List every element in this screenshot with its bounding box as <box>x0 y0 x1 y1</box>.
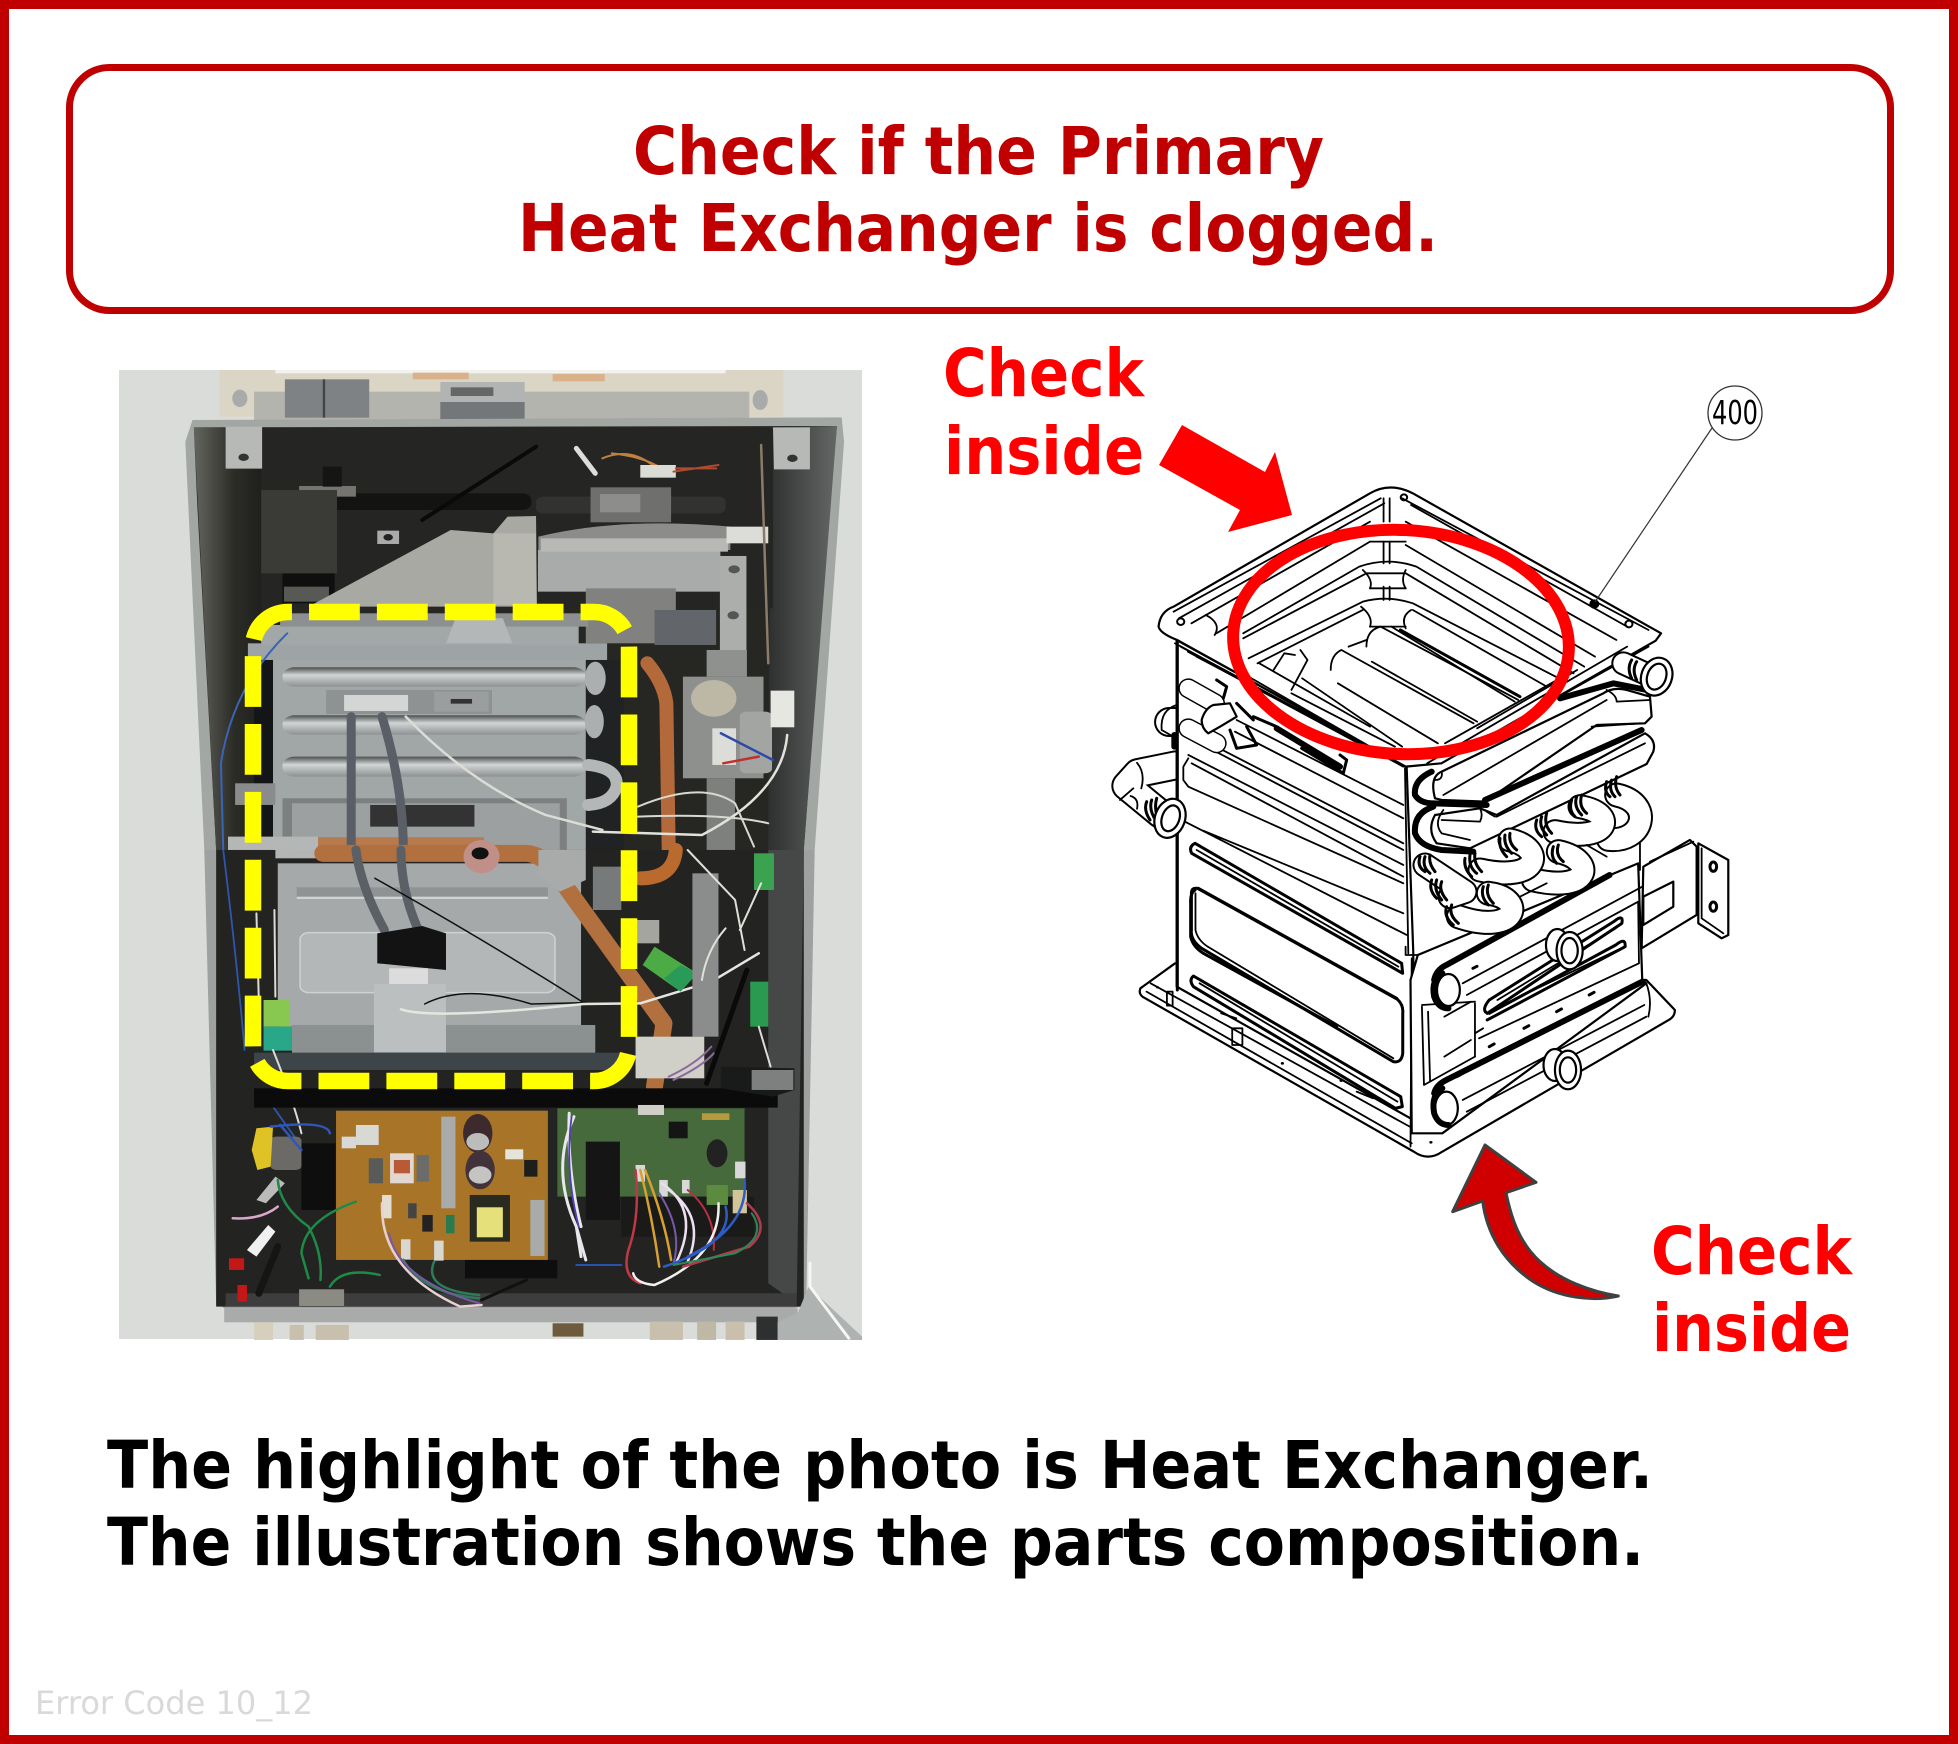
header callout box <box>70 68 1890 310</box>
yellow dashed highlight <box>253 612 629 1081</box>
mounting bracket <box>1642 840 1728 948</box>
check inside label: lower: Check <box>1651 1213 1854 1290</box>
title: Heat Exchanger is clogged. <box>518 190 1438 267</box>
title <box>518 113 1438 267</box>
photo upper half: fan, duct and heat exchanger top <box>185 370 844 850</box>
illustration: primary heat exchanger <box>1120 428 1728 1157</box>
tube loops and U-bends <box>1415 683 1654 925</box>
red circle highlight <box>1227 521 1575 763</box>
left flange and burner connectors <box>1120 680 1347 842</box>
check inside label: upper: inside <box>944 413 1144 490</box>
check inside label: lower <box>1651 1213 1854 1367</box>
photo: water heater interior <box>119 370 862 1340</box>
outlet flange <box>1623 653 1678 700</box>
description text: The illustration shows the parts composition. <box>107 1504 1644 1581</box>
left pipe <box>1126 722 1175 814</box>
check inside label: upper: Check <box>943 335 1146 412</box>
part number 400 <box>1708 386 1762 440</box>
arrow: straight red pointing to inside <box>1159 425 1292 532</box>
right face and lower tubes <box>1410 863 1650 1133</box>
part number 400: 400 <box>1712 393 1758 432</box>
description text: The highlight of the photo is Heat Exchanger. <box>107 1427 1653 1504</box>
top frame and inner burner tubes <box>1159 487 1661 767</box>
title: Check if the Primary <box>633 113 1324 190</box>
check inside label: lower: inside <box>1652 1290 1851 1367</box>
left face lower panels <box>1156 880 1433 1147</box>
description text <box>107 1427 1653 1581</box>
photo lower half: igniter, copper pipe and circuit boards <box>204 840 862 1340</box>
left face panels <box>1175 640 1413 1120</box>
check inside label: upper <box>943 335 1146 490</box>
arrow: curved red pointing up <box>1453 1145 1618 1299</box>
base plate <box>1140 963 1675 1157</box>
error code footnote: Error Code 10_12 <box>35 1684 313 1722</box>
leader line <box>1595 428 1712 602</box>
